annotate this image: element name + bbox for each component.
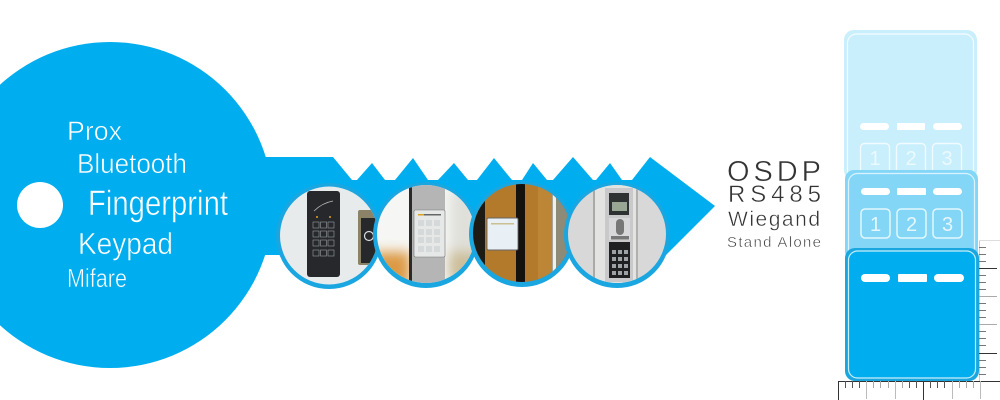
reader card: lightest, back: 1 [869, 148, 881, 170]
reader technology list: Prox [67, 116, 122, 146]
key-shaped blue body [0, 42, 715, 368]
reader card: lightest, back [844, 30, 977, 184]
reader technology list: Fingerprint [88, 184, 228, 223]
reader card: middle: 3 [942, 214, 953, 236]
protocol list: Wiegand [728, 208, 820, 231]
ruler marks [838, 240, 1000, 400]
photo: black prox keypad reader [276, 183, 378, 289]
photo: white reader on wooden door [469, 180, 575, 290]
reader card: lightest, back: 2 [905, 148, 917, 170]
reader technology list: Mifare [67, 263, 127, 293]
protocol list: RS485 [728, 181, 821, 208]
protocol list [727, 156, 821, 251]
protocol list: OSDP [727, 156, 821, 188]
reader card: middle: 1 [870, 214, 881, 236]
photo: white keypad on door frame [372, 180, 480, 290]
reader card: middle: 2 [906, 214, 917, 236]
reader technology list [67, 116, 228, 293]
reader card: middle [845, 170, 978, 264]
reader card: lightest, back: 3 [941, 148, 953, 170]
key hole [17, 182, 63, 228]
protocol list: Stand Alone [727, 234, 821, 251]
photo: fingerprint reader with keypad [564, 180, 670, 290]
reader technology list: Keypad [78, 226, 173, 261]
reader technology list: Bluetooth [77, 148, 187, 179]
reader card: solid blue, front [845, 248, 979, 381]
